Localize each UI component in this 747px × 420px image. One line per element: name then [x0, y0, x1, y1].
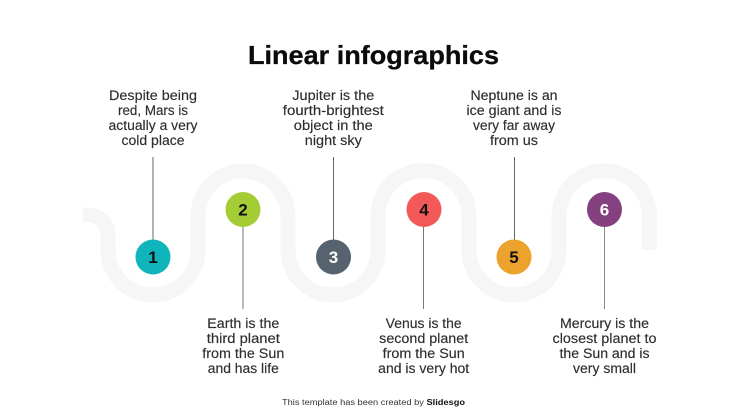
- step 5 connector: [514, 157, 516, 240]
- step 4 text: [378, 316, 469, 376]
- step 2 text: and has life: [208, 361, 279, 376]
- step 2 text: [202, 316, 284, 376]
- step 4 text: from the Sun: [383, 346, 465, 361]
- step 2: [202, 192, 284, 376]
- step 1 text: actually a very: [108, 118, 198, 133]
- step 3 connector: [332, 157, 334, 240]
- step 3 marker: 3: [329, 248, 338, 267]
- step 4 text: second planet: [379, 331, 468, 346]
- step 6 text: [552, 316, 656, 376]
- step 2 connector: [242, 227, 244, 309]
- step 3 text: Jupiter is the: [292, 88, 374, 103]
- step 1 text: cold place: [122, 133, 184, 148]
- footer credit: This template has been created by Slidesgo: [282, 398, 465, 407]
- step 4 marker: 4: [419, 200, 429, 220]
- step 2 text: third planet: [207, 331, 280, 346]
- step 5 text: Neptune is an: [470, 88, 558, 103]
- step 3 marker: [316, 240, 351, 274]
- step 4 connector: [422, 227, 424, 309]
- step 3 text: fourth-brightest: [283, 103, 384, 118]
- step 6 marker: 6: [600, 200, 609, 220]
- step 5 text: ice giant and is: [466, 103, 562, 118]
- step 4 marker: [406, 192, 442, 227]
- step 6 connector: [604, 227, 606, 309]
- step 6: [552, 192, 656, 376]
- step 6 text: very small: [573, 361, 636, 376]
- step 1 text: [108, 88, 198, 148]
- step 1 text: red, Mars is: [118, 103, 188, 118]
- winding path: [83, 171, 650, 295]
- step 5 marker: [496, 240, 532, 274]
- step 1 connector: [152, 157, 154, 240]
- step 4 text: and is very hot: [378, 361, 469, 376]
- step 1: [108, 88, 198, 274]
- step 6 text: the Sun and is: [560, 346, 650, 361]
- step 2 marker: 2: [238, 200, 248, 220]
- step 6 text: Mercury is the: [560, 316, 649, 331]
- step 5 text: from us: [490, 133, 538, 148]
- step 5 text: [466, 88, 562, 148]
- step 6 marker: [587, 192, 622, 227]
- step 3 text: night sky: [305, 133, 362, 148]
- step 2 text: from the Sun: [202, 346, 284, 361]
- step 2 marker: [226, 192, 260, 227]
- step 3 text: [283, 88, 384, 148]
- step 2 text: Earth is the: [207, 316, 279, 331]
- title: Linear infographics: [248, 40, 499, 70]
- step 3 text: object in the: [294, 118, 373, 133]
- step 1 marker: 1: [148, 248, 158, 267]
- step 4: [378, 192, 469, 376]
- step 3: [283, 88, 384, 274]
- step 1 text: Despite being: [109, 88, 197, 103]
- step 5: [466, 88, 562, 274]
- step 1 marker: [136, 240, 170, 274]
- step 6 text: closest planet to: [552, 331, 656, 346]
- step 4 text: Venus is the: [386, 316, 462, 331]
- step 5 text: very far away: [473, 118, 555, 133]
- step 5 marker: 5: [509, 248, 519, 267]
